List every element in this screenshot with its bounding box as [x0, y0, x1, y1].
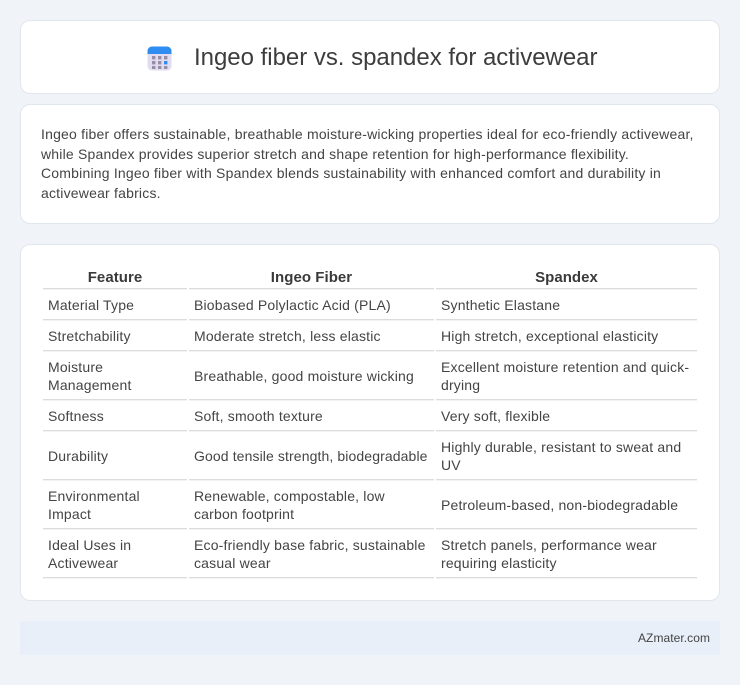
comparison table: Excellent moisture retention and quick-	[441, 359, 689, 375]
comparison table: Feature	[88, 269, 142, 286]
comparison table panel	[20, 244, 720, 601]
comparison table: High stretch, exceptional elasticity	[441, 328, 658, 344]
comparison table: Environmental	[48, 488, 140, 504]
row: environmental impact	[43, 488, 697, 530]
intro text: Ingeo fiber offers sustainable, breathable moisture-wicking properties ideal for eco-friendly activewear,	[41, 126, 694, 142]
comparison table: Breathable, good moisture wicking	[194, 368, 414, 384]
comparison table: Impact	[48, 506, 91, 522]
row: material type	[43, 297, 697, 321]
comparison table: Moisture	[48, 359, 103, 375]
intro text	[41, 126, 694, 201]
row: moisture management	[43, 359, 697, 401]
comparison table: Ingeo Fiber	[271, 269, 352, 286]
row: softness	[43, 408, 697, 432]
row: stretchability	[43, 328, 697, 352]
table header	[43, 269, 697, 290]
intro text: Combining Ingeo fiber with Spandex blends sustainability with enhanced comfort and durability in	[41, 165, 661, 181]
comparison table: drying	[441, 377, 480, 393]
comparison table: Stretchability	[48, 328, 131, 344]
intro text: activewear fabrics.	[41, 185, 161, 201]
heading: Ingeo fiber vs. spandex for activewear	[194, 44, 597, 71]
comparison table: Highly durable, resistant to sweat and	[441, 439, 681, 455]
comparison table: Softness	[48, 408, 104, 424]
comparison table: Management	[48, 377, 132, 393]
comparison table: Very soft, flexible	[441, 408, 550, 424]
comparison table: Biobased Polylactic Acid (PLA)	[194, 297, 391, 313]
comparison table: requiring elasticity	[441, 555, 557, 571]
comparison table: Activewear	[48, 555, 118, 571]
title panel	[20, 20, 720, 94]
footer bar	[20, 621, 720, 655]
comparison table: Synthetic Elastane	[441, 297, 560, 313]
comparison table: Material Type	[48, 297, 134, 313]
intro text panel	[20, 104, 720, 224]
comparison table: Ideal Uses in	[48, 537, 131, 553]
row: ideal uses	[43, 537, 697, 579]
comparison table: Stretch panels, performance wear	[441, 537, 657, 553]
comparison table: casual wear	[194, 555, 271, 571]
comparison table: Spandex	[535, 269, 598, 286]
comparison table: UV	[441, 457, 461, 473]
comparison table: carbon footprint	[194, 506, 294, 522]
comparison table: Renewable, compostable, low	[194, 488, 385, 504]
comparison table: Eco-friendly base fabric, sustainable	[194, 537, 426, 553]
comparison table: Durability	[48, 448, 108, 464]
comparison table: Soft, smooth texture	[194, 408, 323, 424]
comparison table: Moderate stretch, less elastic	[194, 328, 381, 344]
footer credit: AZmater.com	[638, 631, 710, 645]
row: durability	[43, 439, 697, 481]
intro text: while Spandex provides superior stretch and shape retention for high-performance flexibility.	[41, 146, 629, 162]
comparison table: Petroleum-based, non-biodegradable	[441, 497, 678, 513]
icon: calendar	[148, 46, 172, 70]
comparison table: Good tensile strength, biodegradable	[194, 448, 428, 464]
